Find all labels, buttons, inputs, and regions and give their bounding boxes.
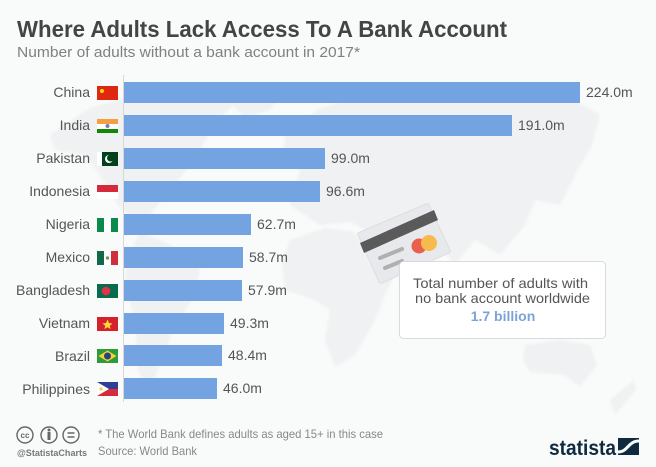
row: Philippines: 46.0m <box>223 380 262 396</box>
row: India: India <box>60 117 90 133</box>
row: India <box>60 115 565 136</box>
row: India: 191.0m <box>518 117 565 133</box>
row: Brazil <box>55 345 267 366</box>
world map background <box>50 84 636 415</box>
row: Mexico: 58.7m <box>249 249 288 265</box>
row: China: China <box>53 84 90 100</box>
title: Where Adults Lack Access To A Bank Account <box>17 16 507 42</box>
row: Indonesia: Indonesia <box>29 183 90 199</box>
row: Philippines: Philippines <box>22 381 90 397</box>
row: Pakistan: 99.0m <box>331 150 370 166</box>
row: Nigeria: 62.7m <box>257 216 296 232</box>
row: Bangladesh <box>16 280 287 301</box>
axis line <box>123 75 124 402</box>
row: Brazil: 48.4m <box>228 347 267 363</box>
row: Brazil: Brazil <box>55 348 90 364</box>
row: China <box>53 82 633 103</box>
statista logo: statista <box>549 437 616 460</box>
row: Mexico <box>46 247 288 268</box>
row: Vietnam: Vietnam <box>39 315 90 331</box>
row: China: 224.0m <box>586 84 633 100</box>
row: Philippines <box>22 378 262 399</box>
row: Pakistan <box>36 148 370 169</box>
callout: worldwide total <box>400 262 606 338</box>
source: Source: World Bank <box>98 444 198 458</box>
row: Vietnam: 49.3m <box>230 315 269 331</box>
credit handle: @StatistaCharts <box>17 448 87 458</box>
row: Indonesia <box>29 181 365 202</box>
icon: creative commons badges: cc <box>21 431 30 440</box>
row: Nigeria: Nigeria <box>46 216 90 232</box>
row: Nigeria <box>46 214 296 235</box>
row: Mexico: Mexico <box>46 249 90 265</box>
row: Bangladesh: 57.9m <box>248 282 287 298</box>
subtitle: Number of adults without a bank account in 2017* <box>17 44 360 61</box>
footnote: * The World Bank defines adults as aged 15+ in this case <box>98 427 383 441</box>
row: Vietnam <box>39 313 269 334</box>
row: Pakistan: Pakistan <box>36 150 90 166</box>
row: Bangladesh: Bangladesh <box>16 282 90 298</box>
callout: worldwide total: 1.7 billion <box>471 308 535 324</box>
row: Indonesia: 96.6m <box>326 183 365 199</box>
callout: worldwide total: no bank account worldwide <box>415 290 590 306</box>
icon: credit card <box>358 204 450 283</box>
callout: worldwide total: Total number of adults with <box>413 275 588 291</box>
icon: creative commons badges <box>17 427 79 443</box>
bar chart <box>16 82 633 399</box>
